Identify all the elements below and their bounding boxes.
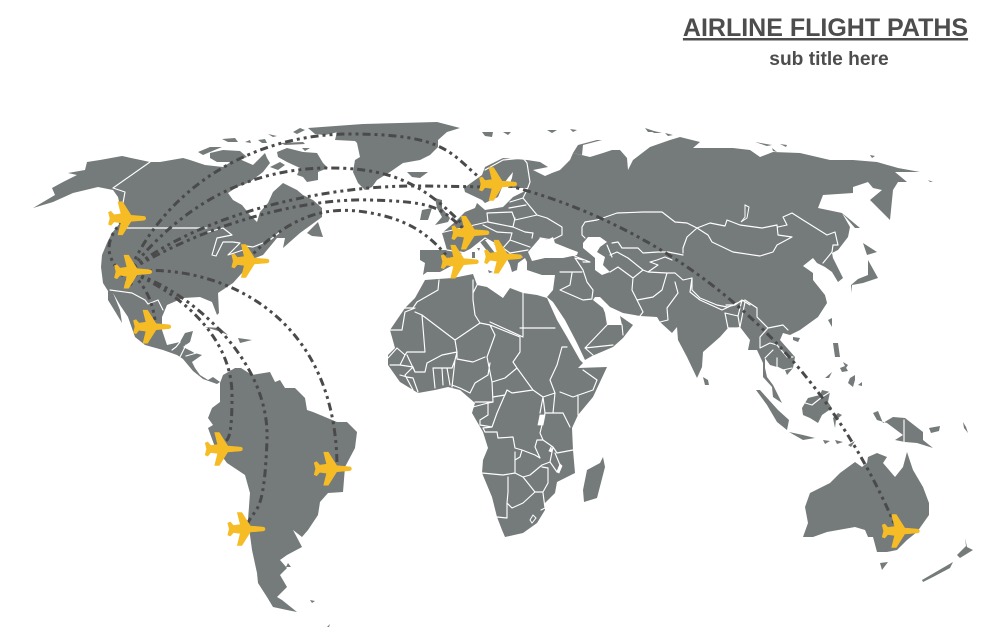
- plane: Los Angeles: [114, 255, 152, 288]
- plane: Brazil: [314, 452, 351, 485]
- route: Vancouver to Los Angeles: [109, 218, 132, 285]
- landmass: South America: [208, 368, 357, 612]
- landmass: Southeast Asia and Japan: [703, 213, 968, 448]
- route: Los Angeles to Chile: [130, 272, 267, 525]
- plane: Italy: [484, 240, 522, 273]
- route: Los Angeles to Mexico: [130, 272, 155, 320]
- plane: Australia: [882, 514, 919, 548]
- lake outlines: [538, 415, 562, 473]
- landmass: Arctic islands and Greenland: [198, 122, 460, 237]
- route: New York to Spain: [245, 210, 452, 262]
- lake: Baikal and Lesotho outlines: [530, 205, 749, 523]
- plane: Paris: [452, 216, 489, 249]
- landmass: Eurasia: [420, 137, 920, 403]
- subtitle: sub title here: [769, 49, 889, 70]
- flight paths: [109, 134, 897, 530]
- country borders: [110, 158, 904, 518]
- route: Los Angeles to Paris, high arc: [130, 168, 470, 270]
- route: Los Angeles to Sweden, northern arc: [130, 134, 485, 270]
- landmass: Australia and New Zealand: [803, 452, 973, 582]
- landmass: Caribbean and small islands: [205, 128, 933, 627]
- route: Sweden to Australia: [498, 183, 897, 530]
- plane: Vancouver: [108, 202, 146, 235]
- landmass: Mediterranean islands: [472, 248, 493, 273]
- landmass: Madagascar: [583, 457, 605, 502]
- landmass: Africa: [388, 274, 607, 537]
- seas: Black Sea and Caspian Sea: [528, 237, 610, 275]
- world map: [33, 122, 973, 627]
- plane: Chile: [228, 512, 265, 546]
- route: Los Angeles to Peru: [130, 272, 232, 448]
- route: Los Angeles to Sweden, middle arc: [130, 185, 495, 270]
- plane: New York: [232, 244, 269, 278]
- plane: Mexico: [134, 310, 171, 343]
- plane markers: [108, 168, 919, 548]
- title: AIRLINE FLIGHT PATHS: [683, 14, 968, 42]
- plane: Sweden: [480, 168, 517, 200]
- landmass: British Isles: [420, 198, 450, 225]
- plane: Peru: [205, 432, 242, 466]
- landmass: North and Central America: [33, 153, 322, 384]
- plane: Spain: [441, 245, 478, 278]
- route: Los Angeles to Paris, low arc: [130, 200, 470, 270]
- route: Los Angeles to Brazil: [130, 271, 337, 465]
